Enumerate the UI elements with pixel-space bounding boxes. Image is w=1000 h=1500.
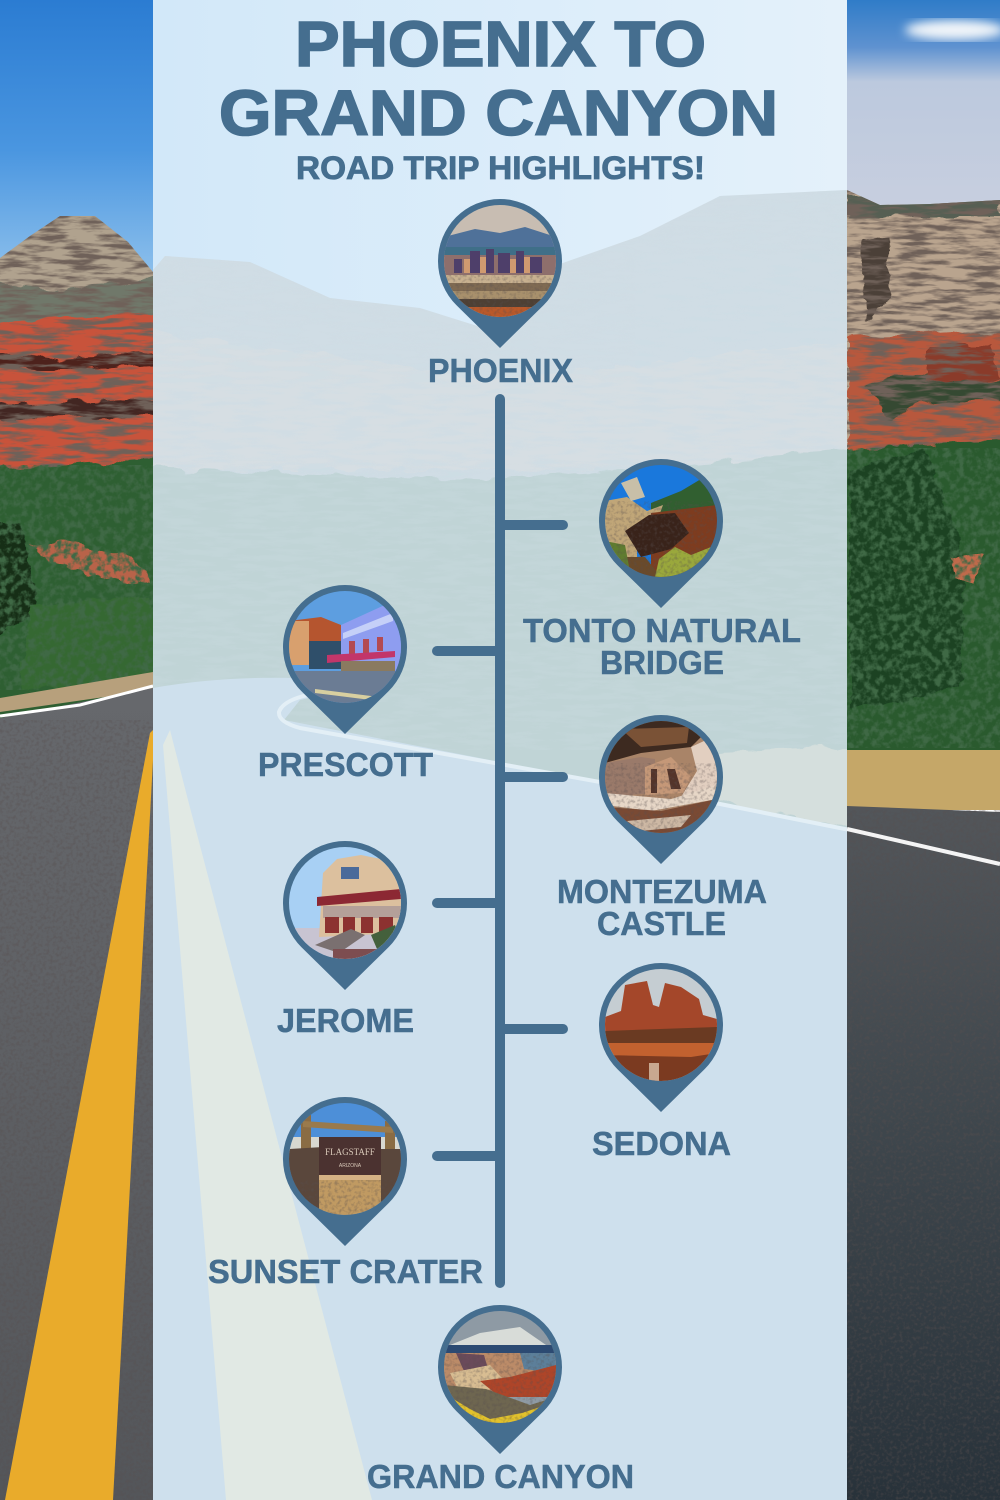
left mountain: [0, 216, 153, 470]
pin: Montezuma Castle: [599, 715, 723, 864]
title: PHOENIX TO: [295, 8, 706, 80]
pin: Sunset Crater: ARIZONA: [339, 1163, 362, 1169]
pin: Sunset Crater: [283, 1097, 407, 1246]
label: Tonto Natural Bridge: TONTO NATURAL: [523, 612, 801, 649]
faded road edge line: [279, 690, 860, 832]
label: Grand Canyon: GRAND CANYON: [367, 1458, 634, 1495]
label: Jerome: JEROME: [277, 1002, 414, 1039]
faded grass: [718, 744, 847, 826]
pin: Prescott: [283, 585, 407, 734]
faded road: [153, 678, 860, 1500]
white cloud: [905, 20, 1000, 40]
left road: [0, 688, 153, 1500]
pin: Grand Canyon: [438, 1305, 562, 1454]
left forest: [0, 458, 165, 730]
pin: Phoenix: [438, 199, 562, 348]
title: GRAND CANYON: [219, 77, 778, 149]
translucent centre panel: [140, 0, 860, 1500]
faded forest: [140, 448, 860, 830]
foliage texture right: [847, 448, 1000, 748]
label: Sunset Crater: SUNSET CRATER: [208, 1253, 483, 1290]
road texture: [0, 720, 1000, 1500]
subtitle: ROAD TRIP HIGHLIGHTS!: [296, 150, 705, 186]
label: Phoenix: PHOENIX: [428, 352, 573, 389]
label: Prescott: PRESCOTT: [258, 746, 433, 783]
pin: Jerome: [283, 841, 407, 990]
faded foliage texture: [153, 460, 847, 750]
pin: Tonto Natural Bridge: [599, 459, 723, 608]
label: Montezuma Castle: [557, 873, 767, 942]
title: [219, 8, 778, 149]
faded mountains: [140, 190, 860, 490]
right forest: [840, 440, 1000, 760]
yellow centre line: [5, 730, 153, 1500]
label: Tonto Natural Bridge: BRIDGE: [600, 644, 724, 681]
route timeline: [437, 399, 563, 1283]
label: Montezuma Castle: MONTEZUMA: [557, 873, 767, 910]
right sky with clouds: [847, 0, 1000, 215]
label: Sedona: SEDONA: [592, 1125, 731, 1162]
roadside grass: [847, 750, 1000, 810]
pin: Sedona: [599, 963, 723, 1112]
foliage texture: [0, 465, 153, 690]
faded yellow line: [163, 730, 372, 1500]
right road: [847, 806, 1000, 1500]
label: Montezuma Castle: CASTLE: [597, 905, 726, 942]
white road edge lines: [0, 686, 153, 716]
left sky: [0, 0, 153, 300]
panel sky: [153, 0, 847, 340]
pin: Sunset Crater: FLAGSTAFF: [325, 1147, 375, 1157]
side ground base: [0, 430, 1000, 750]
right mountain: [847, 190, 1000, 460]
label: Tonto Natural Bridge: [523, 612, 801, 681]
